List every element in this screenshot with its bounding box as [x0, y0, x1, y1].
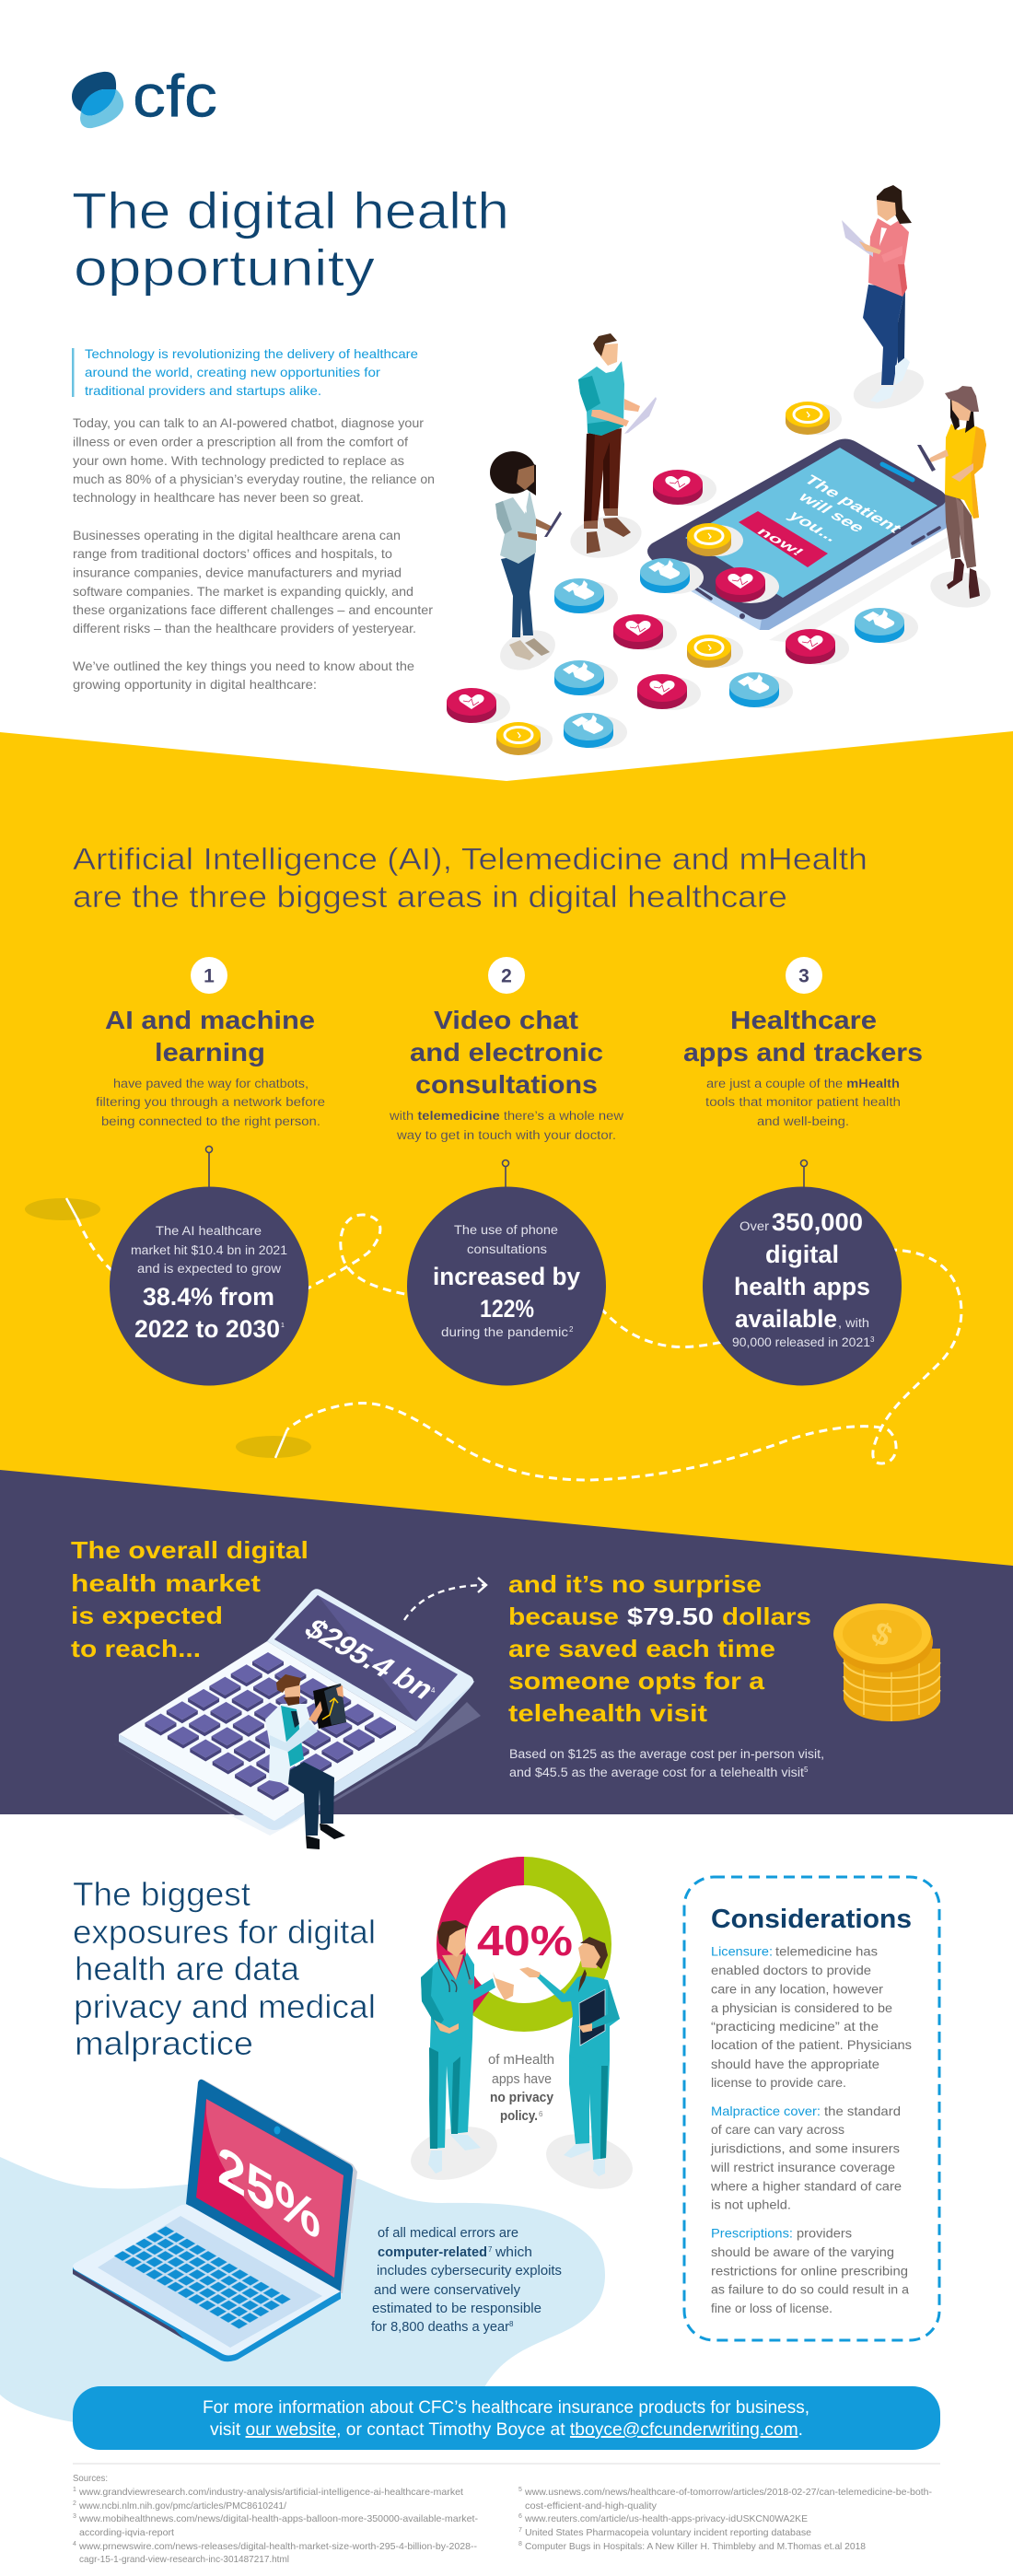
sources: www.ncbi.nlm.nih.gov/pmc/articles/PMC8610241/ — [78, 2500, 286, 2512]
calculator with doctor — [112, 1589, 481, 1849]
market size heading: health market — [71, 1569, 261, 1597]
heading: three biggest areas: are the three biggest areas in digital healthcare — [73, 880, 787, 914]
market size heading: is expected — [71, 1602, 223, 1629]
body text: We’ve outlined the key things you need to know about the — [73, 659, 414, 673]
body text: range from traditional doctors’ offices and hospitals, to — [73, 546, 392, 561]
malpractice cover: will restrict insurance coverage — [710, 2160, 895, 2174]
column 2 description: way to get in touch with your doctor. — [396, 1128, 616, 1142]
cost footnote: Based on $125 as the average cost per in-person visit, — [509, 1747, 824, 1761]
column 1 stat circle: The AI healthcare — [156, 1224, 262, 1238]
exposures heading: health are data — [75, 1950, 300, 1987]
column 2 title: consultations — [415, 1070, 598, 1099]
mHealth privacy text: of mHealth — [488, 2053, 554, 2068]
body text: technology in healthcare has never been so great. — [73, 490, 364, 505]
sources: 5 — [518, 2487, 522, 2493]
licensure: should have the appropriate — [711, 2057, 879, 2071]
yellow section background — [0, 731, 1013, 1584]
column 2 stat circle: The use of phone — [454, 1223, 558, 1237]
laptop lid: 25% — [217, 2133, 320, 2253]
prescriptions: fine or loss of license. — [711, 2301, 833, 2315]
title — [72, 181, 509, 297]
sources: cost-efficient-and-high-quality — [525, 2500, 658, 2512]
exposures heading — [73, 1875, 376, 2062]
intro callout: traditional providers and startups alike. — [85, 383, 321, 398]
malpractice cover: is not upheld. — [711, 2197, 791, 2212]
heading: three biggest areas — [73, 842, 867, 914]
body text: software companies. The market is expanding quickly, and — [73, 584, 413, 599]
calculator shadow — [112, 1702, 481, 1816]
mHealth privacy text — [488, 2053, 554, 2124]
malpractice cover: where a higher standard of care — [710, 2178, 902, 2193]
donut chart: 40%: 40% — [477, 1917, 573, 1964]
column 2 title: Video chat — [434, 1006, 578, 1034]
licensure: Licensure: — [711, 1943, 773, 1958]
medical errors text: for 8,800 deaths a year — [371, 2320, 509, 2335]
heading: three biggest areas: Artificial Intelligence (AI), Telemedicine and mHealth — [73, 842, 867, 876]
medical errors text: includes cybersecurity exploits — [377, 2264, 562, 2279]
medical errors text: estimated to be responsible — [372, 2302, 541, 2316]
mHealth privacy text: policy. — [500, 2109, 538, 2124]
column 2 stat circle: 2 — [569, 1325, 574, 1334]
donut chart: 40% — [451, 1871, 597, 2017]
malpractice cover: jurisdictions, and some insurers — [710, 2141, 900, 2156]
intro callout: around the world, creating new opportunities for — [85, 365, 380, 379]
sources: United States Pharmacopeia voluntary incident reporting database — [525, 2527, 811, 2538]
column 2 stat circle: increased by — [433, 1263, 580, 1290]
column 3 title: Healthcare — [730, 1006, 877, 1034]
intro callout — [72, 346, 418, 398]
mHealth privacy text: apps have — [492, 2072, 552, 2087]
phone: now! — [753, 526, 807, 558]
sources: Sources: — [73, 2473, 108, 2484]
malpractice cover: of care can vary across — [711, 2122, 844, 2137]
column 2 description — [389, 1109, 623, 1142]
light blue blob background — [0, 2157, 605, 2422]
sources: 1 — [73, 2487, 76, 2493]
column 1: AI and machine learning — [96, 957, 325, 1385]
considerations heading: Considerations — [711, 1905, 912, 1934]
exposures heading: exposures for digital — [73, 1913, 376, 1951]
navy market section background — [0, 1470, 1013, 1814]
number badge 3 — [786, 957, 822, 994]
telehealth saving text: because — [508, 1603, 619, 1630]
licensure: location of the patient. Physicians — [711, 2037, 912, 2052]
title: The digital health — [72, 181, 509, 239]
medical errors text — [371, 2226, 562, 2335]
doctor right — [519, 1937, 639, 2197]
column 1 description: filtering you through a network before — [96, 1095, 325, 1109]
medical errors text: computer-related — [378, 2245, 487, 2260]
column 1 title: AI and machine — [105, 1006, 315, 1034]
intro callout: Technology is revolutionizing the delivery of healthcare — [85, 346, 418, 361]
calculator keys — [146, 1652, 396, 1800]
column 1 stat circle: and is expected to grow — [137, 1262, 281, 1276]
sources: Computer Bugs in Hospitals: A New Killer H. Thimbleby and M.Thomas et.al 2018 — [525, 2541, 866, 2552]
prescriptions: as failure to do so could result in a — [711, 2282, 909, 2297]
body text: Today, you can talk to an AI-powered chatbot, diagnose your — [73, 415, 424, 430]
column 1 description: being connected to the right person. — [101, 1114, 320, 1128]
column 3 stat circle: 90,000 released in 2021 — [732, 1335, 870, 1349]
exposures heading: privacy and medical — [74, 1987, 376, 2025]
call to action banner: For more information about CFC’s healthcare insurance products for business, — [203, 2398, 809, 2418]
woman in pink shirt — [842, 185, 928, 415]
column 1 stat circle: 38.4% from — [143, 1283, 274, 1311]
sources: 7 — [518, 2527, 522, 2534]
column 2 stat circle: consultations — [467, 1242, 547, 1256]
chips: hearts — [447, 470, 849, 724]
column 2 title: and electronic — [410, 1038, 603, 1067]
logo: cfc — [72, 63, 217, 129]
malpractice cover: Malpractice cover: — [711, 2104, 821, 2118]
laptop base — [73, 2205, 341, 2361]
woman with afro hair — [490, 451, 562, 677]
man in teal shirt — [567, 333, 657, 563]
column 1 stat circle: 2022 to 2030 — [134, 1315, 280, 1343]
medical errors text: 8 — [509, 2320, 514, 2328]
telehealth saving text: are saved each time — [508, 1635, 775, 1662]
phone: will see — [794, 489, 869, 535]
mHealth privacy text: no privacy — [490, 2091, 553, 2105]
body text: much as 80% of a physician’s everyday routine, the reliance on — [73, 472, 435, 486]
woman with hat and yellow dress — [917, 386, 994, 612]
medical errors text: of all medical errors are — [378, 2226, 518, 2241]
sources: 2 — [73, 2500, 76, 2507]
cost footnote: and $45.5 as the average cost for a telehealth visit — [509, 1766, 804, 1779]
market size heading — [71, 1536, 309, 1662]
dashed arrow — [404, 1578, 486, 1620]
column 2 description: with telemedicine there’s a whole new — [389, 1109, 623, 1123]
body text: your own home. With technology predicted to replace as — [73, 453, 404, 468]
column 1 stat circle: 1 — [281, 1323, 285, 1329]
sources: www.prnewswire.com/news-releases/digital-health-market-size-worth-295-4-billion-by-2028-- — [78, 2541, 477, 2552]
cost footnote — [509, 1747, 824, 1779]
column 3: healthcare apps and trackers — [683, 957, 923, 1385]
telehealth saving text: dollars — [722, 1603, 811, 1630]
doctor left — [405, 1920, 514, 2189]
phone: The patient — [800, 472, 906, 535]
body text: illness or even order a prescription all from the comfort of — [73, 435, 408, 449]
sources: 4 — [73, 2541, 76, 2547]
calculator readout: $295.4 bn — [297, 1614, 442, 1705]
column 1 stat circle — [110, 1146, 309, 1385]
sources: 6 — [518, 2513, 522, 2520]
hero illustration: phone, people and chips — [447, 185, 994, 755]
column 3 description: are just a couple of the mHealth — [706, 1077, 900, 1090]
sources: cagr-15-1-grand-view-research-inc-301487217.html — [79, 2554, 289, 2565]
body text: these organizations face different challenges – and encounter — [73, 602, 433, 617]
exposures heading: The biggest — [73, 1875, 250, 1913]
licensure — [711, 1943, 912, 2090]
call to action banner — [73, 2386, 940, 2450]
column 1 description — [96, 1077, 325, 1128]
mHealth privacy text: 6 — [539, 2110, 543, 2118]
calculator body — [119, 1589, 474, 1830]
column 3 stat circle: digital — [765, 1241, 839, 1268]
call to action banner: visit our website, or contact Timothy Boyce at tboyce@cfcunderwriting.com. — [210, 2420, 803, 2440]
licensure: license to provide care. — [711, 2075, 846, 2090]
laptop lid — [186, 2080, 357, 2293]
market size heading: The overall digital — [71, 1536, 309, 1564]
exposures heading: malpractice — [75, 2024, 253, 2062]
doctor sitting on calculator — [265, 1674, 346, 1849]
laptop with 25% — [73, 2080, 357, 2361]
column 3 title: apps and trackers — [683, 1038, 923, 1067]
icon: coin stack — [833, 1603, 940, 1721]
column 3 stat circle: , with — [838, 1316, 869, 1330]
malpractice cover: the standard — [824, 2104, 901, 2118]
telehealth saving text: $79.50 — [627, 1603, 714, 1630]
column 2 stat circle: during the pandemic — [441, 1325, 568, 1339]
prescriptions: Prescriptions: — [711, 2226, 793, 2241]
sources: www.usnews.com/news/healthcare-of-tomorrow/articles/2018-02-27/can-telemedicine-be-both- — [524, 2487, 933, 2498]
chips: thumbs up — [554, 558, 918, 749]
prescriptions: providers — [797, 2226, 852, 2241]
column 2 title — [410, 1006, 603, 1099]
licensure: “practicing medicine” at the — [711, 2019, 879, 2034]
icon: coin stack: $ — [866, 1615, 898, 1654]
prescriptions — [711, 2226, 909, 2315]
licensure: a physician is considered to be — [711, 2000, 892, 2015]
medical errors text: which — [495, 2245, 532, 2260]
number badge 2 — [488, 957, 525, 994]
column 1 title — [105, 1006, 315, 1067]
licensure: care in any location, however — [711, 1982, 883, 1997]
body text: growing opportunity in digital healthcare: — [73, 677, 317, 692]
phone — [647, 438, 960, 643]
medical errors text: 7 — [488, 2245, 493, 2254]
column 3 stat circle: available — [735, 1305, 837, 1333]
sources: 3 — [73, 2513, 76, 2520]
column 1 title: learning — [155, 1038, 265, 1067]
sources: according-iqvia-report — [79, 2527, 174, 2538]
sources: www.mobihealthnews.com/news/digital-health-apps-balloon-more-350000-available-market- — [78, 2513, 478, 2524]
medical errors text: and were conservatively — [374, 2283, 521, 2298]
telehealth saving text — [508, 1570, 811, 1727]
column 3 description: tools that monitor patient health — [705, 1095, 901, 1109]
dashed route behind circles — [25, 1198, 961, 1480]
body text: different risks – than the healthcare providers of yesteryear. — [73, 621, 416, 635]
column 2: video chat and electronic consultations — [389, 957, 623, 1385]
number badge 2: 2 — [501, 965, 512, 987]
calculator readout: 4 — [431, 1686, 436, 1695]
prescriptions: should be aware of the varying — [711, 2244, 894, 2259]
column 2 stat circle — [407, 1160, 606, 1385]
column 1 description: have paved the way for chatbots, — [113, 1077, 309, 1090]
number badge 3: 3 — [798, 965, 809, 987]
telehealth saving text: and it’s no surprise — [508, 1570, 762, 1598]
licensure: enabled doctors to provide — [711, 1963, 871, 1977]
sources: www.reuters.com/article/us-health-apps-privacy-idUSKCN0WA2KE — [524, 2513, 808, 2524]
body text: insurance companies, device manufacturers and myriad — [73, 565, 402, 580]
market size heading: to reach... — [71, 1635, 201, 1662]
telehealth saving text: someone opts for a — [508, 1667, 765, 1695]
cost footnote: 5 — [804, 1766, 809, 1774]
column 3 description — [705, 1077, 901, 1128]
column 3 stat circle: 350,000 — [772, 1208, 863, 1236]
phone: you... — [785, 508, 844, 544]
telehealth saving text: telehealth visit — [508, 1699, 707, 1727]
column 3 stat circle: 3 — [870, 1335, 875, 1344]
column 3 stat circle: health apps — [734, 1273, 870, 1300]
sources: www.grandviewresearch.com/industry-analysis/artificial-intelligence-ai-healthcare-market — [78, 2487, 463, 2498]
prescriptions: restrictions for online prescribing — [711, 2263, 908, 2278]
column 2 stat circle: 122% — [480, 1295, 534, 1323]
column 3 title — [683, 1006, 923, 1067]
sources — [73, 2473, 933, 2565]
number badge 1 — [191, 957, 227, 994]
panel: considerations — [684, 1877, 939, 2340]
logo: cfc: cfc — [133, 63, 217, 129]
chips: clocks — [496, 402, 842, 755]
malpractice cover — [710, 2104, 902, 2212]
column 1 stat circle: market hit $10.4 bn in 2021 — [131, 1243, 287, 1257]
column 3 description: and well-being. — [757, 1114, 849, 1128]
body text: Businesses operating in the digital healthcare arena can — [73, 528, 401, 542]
title: opportunity — [74, 239, 375, 297]
body text — [73, 415, 435, 692]
column 3 stat circle — [703, 1160, 902, 1385]
sources: 8 — [518, 2541, 522, 2547]
column 3 stat circle: Over — [739, 1219, 770, 1233]
licensure: telemedicine has — [775, 1943, 878, 1958]
number badge 1: 1 — [204, 965, 215, 987]
